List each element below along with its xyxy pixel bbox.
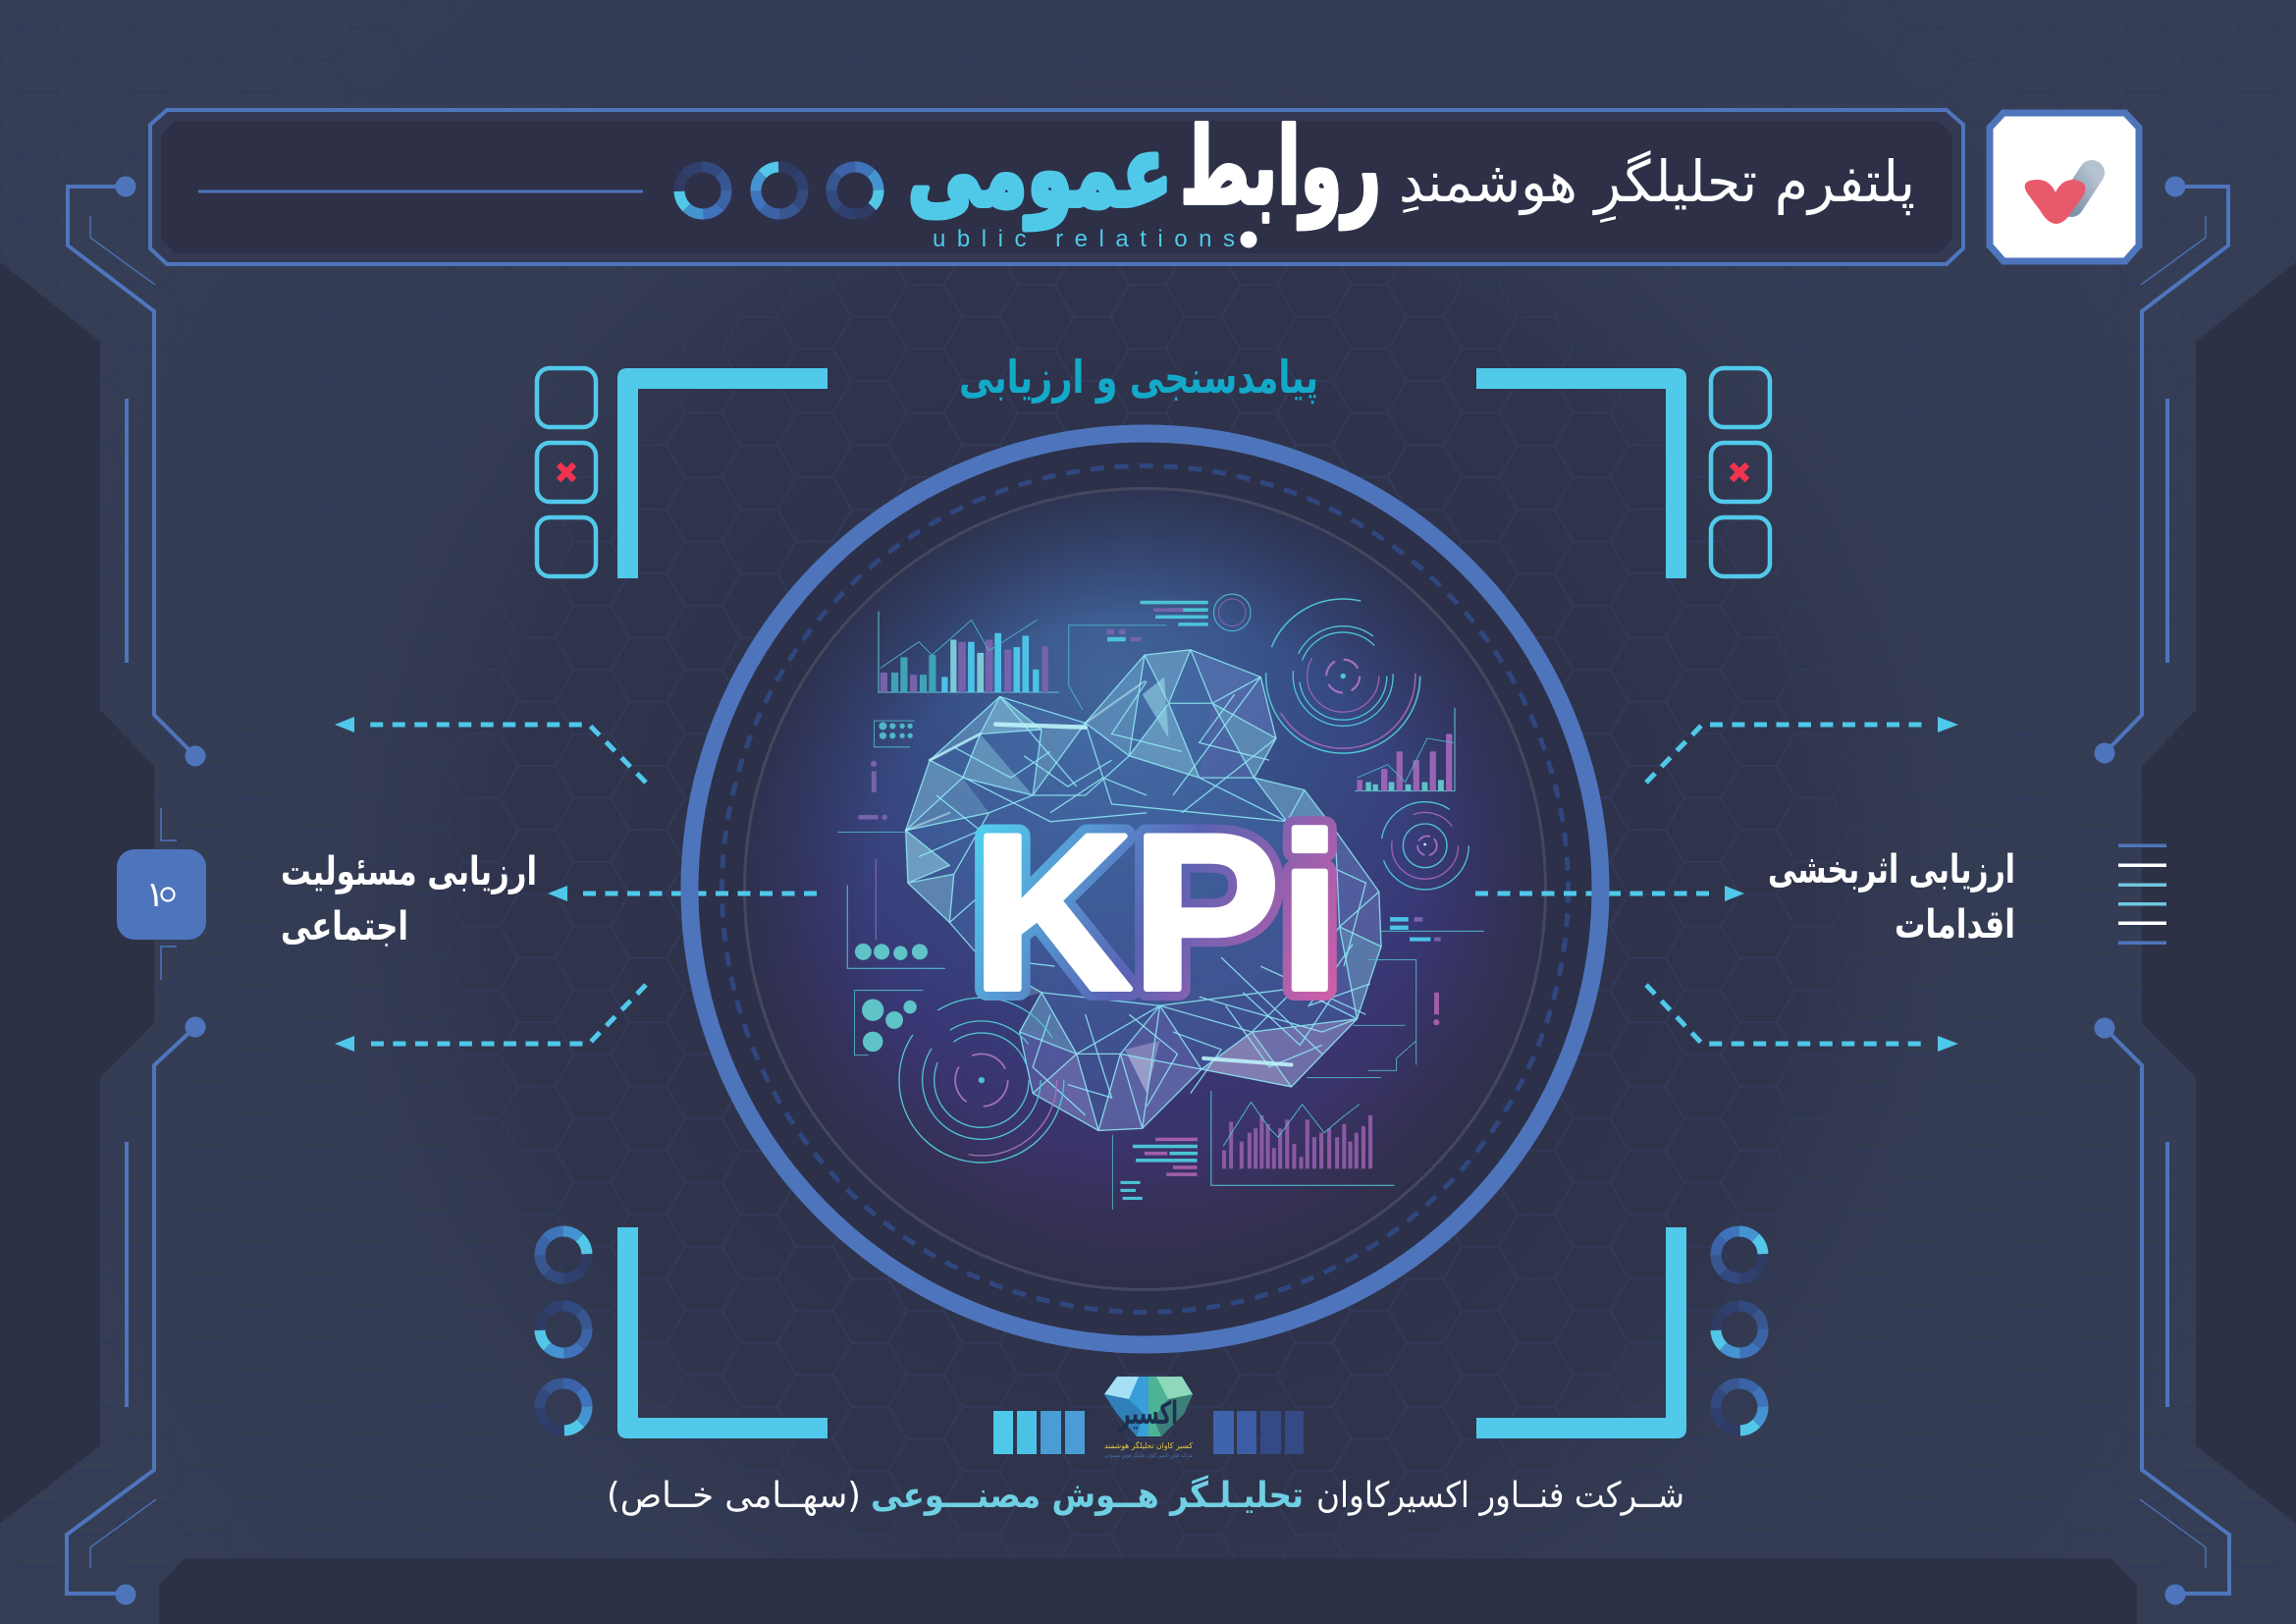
company logo: gem: اکسیر	[1118, 1394, 1178, 1432]
bar chart: bottom	[1112, 1091, 1394, 1210]
circuit lines: right side	[2095, 177, 2229, 1604]
bar chart: top left	[879, 611, 1059, 692]
dashed arrow: right middle	[1475, 886, 1744, 901]
right label	[1768, 847, 2015, 947]
footer stripes: right	[1213, 1411, 1304, 1454]
dashed arrow: right top	[1646, 717, 1958, 783]
page number badge	[117, 849, 206, 940]
KPI wordmark: KPi	[972, 787, 1341, 1036]
header rings	[669, 143, 902, 238]
left label: اجتماعی	[281, 904, 408, 949]
header title: پلتفرم تحلیلگرِ هوشمندِ	[1399, 148, 1915, 223]
logo wordmark: public relations: ublic relations	[933, 226, 1235, 252]
footer company name	[607, 1475, 1684, 1516]
callout marks: right	[1307, 917, 1484, 1077]
corner bracket: bottom right	[1476, 1227, 1686, 1438]
network mesh	[906, 650, 1381, 1130]
left label	[281, 849, 537, 949]
corner bracket: bottom left	[617, 1227, 828, 1438]
footer company name: (سهــامی خــاص)	[607, 1476, 861, 1516]
footer company name: شــرکت فنــاور اکسیرکاوان	[1316, 1476, 1684, 1516]
central circle	[689, 434, 1600, 1345]
section heading: پیامدسنجی و ارزیابی	[959, 351, 1318, 405]
central circle outer ring	[689, 434, 1600, 1345]
left label: ارزیابی مسئولیت	[281, 849, 537, 894]
rings: bottom left	[530, 1221, 597, 1440]
dashed arrow: left middle	[548, 886, 817, 901]
bar chart: right	[1355, 708, 1455, 791]
KPI wordmark: KPi	[972, 787, 1341, 1036]
logo wordmark: public relations: عمومی	[908, 114, 1172, 230]
dashed arrow: right bottom	[1646, 985, 1958, 1052]
dashed arrow: left top	[335, 717, 646, 783]
rings: bottom right	[1706, 1221, 1773, 1440]
radar rings: bottom left	[899, 998, 1064, 1163]
right label: اقدامات	[1895, 902, 2015, 947]
inner disc	[744, 489, 1545, 1290]
callout lines: top	[1069, 594, 1251, 710]
header decorative line	[198, 190, 643, 192]
side bars: right	[2118, 844, 2166, 945]
company logo: gem	[1104, 1377, 1193, 1459]
company logo: gem: کسیر کاوان تحلیلگر هوشمند	[1104, 1440, 1193, 1450]
radar rings: top right	[1266, 599, 1420, 753]
header bar	[150, 106, 1963, 264]
logo wordmark: public relations	[908, 106, 1381, 252]
icon box: heart and check	[1990, 113, 2139, 261]
company logo: gem: شرکت فناور اکسیر کاوان تحلیلگر هوش مصنوعی	[1104, 1451, 1193, 1459]
small pie icons: left	[837, 721, 915, 832]
page number badge: ۰	[158, 875, 178, 915]
footer stripes: left	[993, 1411, 1085, 1454]
checkboxes: left	[537, 368, 596, 576]
pie chart group: left	[847, 859, 945, 1056]
footer company name: تحلیـلـگر هــوش مصنـــوعی	[871, 1475, 1304, 1516]
right label: ارزیابی اثربخشی	[1768, 847, 2015, 893]
crystal network and dashboards artwork	[837, 594, 1484, 1210]
radar rings: right	[1381, 802, 1468, 890]
corner bracket: top left	[617, 368, 828, 578]
corner bracket: top right	[1476, 368, 1686, 578]
page number badge: ۱	[145, 875, 165, 915]
circuit lines: left side	[67, 177, 206, 1604]
checkboxes: right	[1711, 368, 1770, 576]
dashed arrow: left bottom	[335, 985, 646, 1052]
logo wordmark: public relations: روابط	[1180, 106, 1381, 230]
